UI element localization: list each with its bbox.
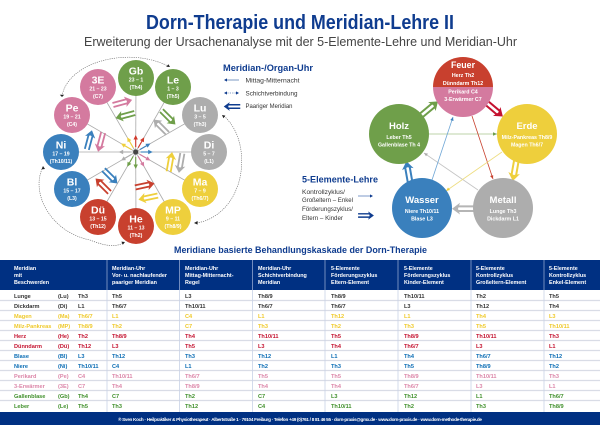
table header: Beschwerden	[14, 280, 49, 286]
table header	[0, 260, 600, 290]
table header: Kinder-Element	[404, 280, 444, 286]
row: Leber: Th12	[185, 404, 198, 410]
row: 3-Erwärmer: C7	[78, 384, 85, 390]
row: Herz: Herz	[14, 334, 26, 340]
meridian Pe: 19 – 21	[63, 114, 81, 120]
row: 3-Erwärmer: Th8/9	[185, 384, 200, 390]
row: Milz-Pankreas: C7	[185, 324, 192, 330]
row: 3-Erwärmer: Th4	[112, 384, 123, 390]
row: 3-Erwärmer: Th4	[331, 384, 342, 390]
row: Herz: Th10/11	[476, 334, 497, 340]
promotion cycle arrows	[401, 97, 522, 214]
row: Dünndarm: Th6/7	[404, 344, 419, 350]
row: Niere: Th8/9	[476, 364, 491, 370]
row: Herz: Th4	[185, 334, 196, 340]
row: Milz-Pankreas: Th3	[404, 324, 414, 330]
clock spokes	[61, 78, 209, 226]
element Feuer: Herz Th2	[452, 73, 474, 79]
meridian 3E: 21 – 23	[89, 86, 107, 92]
row: Perikard: (Pe)	[58, 374, 69, 380]
table header: Kontrollzyklus	[549, 273, 586, 279]
table header: mit	[14, 273, 22, 279]
row: Gallenblase: C7	[112, 394, 119, 400]
table header: Förderungszyklus	[331, 273, 377, 279]
meridian He: (Th2)	[130, 233, 143, 239]
row: Herz: Th5	[331, 334, 341, 340]
row: Dickdarm: Th6/7	[258, 304, 273, 310]
row: 3-Erwärmer	[14, 384, 556, 390]
table header: Kontrollzyklus	[476, 273, 513, 279]
row: 3-Erwärmer: 3-Erwärmer	[14, 384, 46, 390]
row: 3-Erwärmer: L1	[549, 384, 556, 390]
element Wasser: Wasser	[405, 195, 439, 206]
meridian Ma	[182, 171, 218, 207]
row: Milz-Pankreas: Th5	[476, 324, 486, 330]
row: Leber: (Le)	[58, 404, 68, 410]
legend: five elements	[302, 174, 378, 222]
element Metall: Lunge Th3	[490, 209, 516, 215]
row: Perikard: Th10/11	[112, 374, 133, 380]
meridian He	[118, 208, 154, 244]
meridian Le: (Th5)	[167, 94, 180, 100]
legend heading: Meridian-/Organ-Uhr	[223, 63, 313, 73]
row: Leber: Th3	[112, 404, 122, 410]
row: Magen: Th4	[476, 314, 487, 320]
row: Dickdarm	[14, 304, 560, 310]
row: Niere: Th2	[258, 364, 268, 370]
row: Blase: Th12	[112, 354, 125, 360]
row: Perikard: Th5	[258, 374, 268, 380]
table header: Meridian-Uhr	[258, 266, 292, 272]
row: Blase: Th3	[185, 354, 195, 360]
row: Perikard: C4	[78, 374, 86, 380]
row: Gallenblase: L1	[476, 394, 483, 400]
row: Herz: Th8/9	[112, 334, 127, 340]
meridian Di	[191, 134, 227, 170]
element Feuer: Feuer	[451, 60, 475, 71]
row: Milz-Pankreas: Th10/11	[549, 324, 570, 330]
table header: Großeltern-Element	[476, 280, 527, 286]
row: Niere: C4	[112, 364, 120, 370]
element Feuer: 3-Erwärmer C7	[444, 97, 482, 103]
meridian Dü: 13 – 15	[89, 216, 107, 222]
row: Herz: Th2	[78, 334, 88, 340]
row: Lunge	[14, 294, 559, 300]
meridian Ma: 7 – 9	[194, 188, 206, 194]
row: Dickdarm: Th10/11	[185, 304, 206, 310]
chart: five elements	[369, 57, 557, 238]
meridian Lu: 3 – 5	[194, 114, 206, 120]
meridian Le	[155, 69, 191, 105]
row: Lunge: (Lu)	[58, 294, 69, 300]
element Holz	[369, 104, 429, 164]
row: Leber: Th10/11	[331, 404, 352, 410]
meridian Bl: (L3)	[67, 196, 77, 202]
row: Dünndarm	[14, 344, 556, 350]
row: Leber: Th2	[404, 404, 414, 410]
element Erde: Magen Th6/7	[511, 142, 543, 148]
row: Milz-Pankreas: Th8/9	[78, 324, 93, 330]
table header: 5-Elemente	[331, 266, 360, 272]
meridian Ni	[43, 134, 79, 170]
row: Perikard: Th8/9	[404, 374, 419, 380]
row: Gallenblase: (Gb)	[58, 394, 70, 400]
table header: Eltern-Element	[331, 280, 369, 286]
title: Dorn-Therapie und Meridian-Lehre II	[146, 12, 454, 34]
legend item: paired meridian: Paariger Meridian	[246, 104, 292, 110]
row: Dünndarm: L3	[112, 344, 119, 350]
row: Niere: Th10/11	[78, 364, 99, 370]
meridian Dü: Dü	[91, 204, 105, 216]
element Metall	[473, 178, 533, 238]
meridian Ni: Ni	[56, 140, 66, 152]
row: Blase: (Bl)	[58, 354, 67, 360]
table header: Enkel-Element	[549, 280, 586, 286]
row: Milz-Pankreas: Th2	[112, 324, 122, 330]
element Erde: Erde	[516, 121, 538, 132]
element Wasser: Blase L3	[411, 216, 433, 222]
meridian Lu	[182, 97, 218, 133]
meridian MP	[155, 199, 191, 235]
row: Magen: L3	[549, 314, 556, 320]
legend: meridian organ clock	[223, 63, 313, 111]
table header: Meridian-Uhr	[185, 266, 219, 272]
table header: 5-Elemente	[549, 266, 578, 272]
row: Leber: Th5	[78, 404, 88, 410]
legend heading: 5-Elemente-Lehre	[302, 174, 378, 184]
legend item: promotion cycle: Eltern – Kinder	[302, 216, 343, 222]
row: Dünndarm: Th12	[78, 344, 91, 350]
row: Niere	[14, 364, 559, 370]
row: Magen: Th12	[331, 314, 344, 320]
legend item: control cycle: Großeltern – Enkel	[302, 198, 353, 204]
meridian Le: 1 – 3	[167, 86, 179, 92]
row: Gallenblase: Th12	[404, 394, 417, 400]
row: Gallenblase: Th4	[78, 394, 89, 400]
table header: paariger Meridian	[112, 280, 157, 286]
row: Perikard	[14, 374, 559, 380]
legend item: control cycle: Kontrollzyklus/	[302, 190, 345, 196]
meridian Bl	[54, 171, 90, 207]
row: Niere: (Ni)	[58, 364, 67, 370]
table header: Meridian	[258, 280, 280, 286]
row: Blase: Th12	[549, 354, 562, 360]
row: Dünndarm: (Dü)	[58, 344, 69, 350]
meridian Ma: Ma	[193, 176, 207, 188]
meridian Di: (L1)	[204, 159, 214, 165]
row: Dünndarm: L3	[476, 344, 483, 350]
meridian Di: Di	[204, 140, 214, 152]
meridian Pe: (C4)	[67, 122, 77, 128]
row: Lunge: Th10/11	[404, 294, 425, 300]
meridian He: He	[129, 214, 143, 226]
element Wasser: Niere Th10/11	[405, 209, 439, 215]
row: Leber	[14, 404, 564, 410]
row: Leber: Leber	[14, 404, 30, 410]
legend item: promotion cycle	[302, 207, 374, 222]
table header: 5-Elemente	[404, 266, 433, 272]
meridian Ni: (Th10/11)	[50, 159, 73, 165]
element Metall: Dickdarm L1	[487, 216, 519, 222]
row: Niere: Th2	[549, 364, 559, 370]
row: Lunge: Th5	[549, 294, 559, 300]
table header: Mittag-Mitternacht-	[185, 273, 234, 279]
row: Niere: Niere	[14, 364, 28, 370]
row: Dünndarm: Th4	[331, 344, 342, 350]
meridian Bl: 15 – 17	[63, 188, 81, 194]
row: Dickdarm: Dickdarm	[14, 304, 40, 310]
chart: meridian organ clock	[39, 57, 242, 246]
row: Niere: Th3	[331, 364, 341, 370]
meridian Pe	[54, 97, 90, 133]
row: Gallenblase	[14, 394, 564, 400]
row: Perikard: Th6/7	[185, 374, 200, 380]
row: Blase: Th12	[258, 354, 271, 360]
clock hub	[133, 149, 138, 155]
meridian Gb: 23 – 1	[129, 78, 143, 84]
row: Lunge: Th8/9	[258, 294, 273, 300]
row: Milz-Pankreas	[14, 324, 570, 330]
element Metall: Metall	[490, 195, 516, 206]
element Holz: Gallenblase Th 4	[378, 142, 420, 148]
legend item: control cycle	[302, 190, 373, 204]
table header: Schichtverbindung	[258, 273, 307, 279]
meridian Pe: Pe	[66, 102, 79, 114]
row: Milz-Pankreas: (MP)	[58, 324, 70, 330]
row: Lunge: Th3	[78, 294, 88, 300]
row: Magen	[14, 314, 556, 320]
element Holz: Holz	[389, 121, 409, 132]
element Holz: Leber Th5	[386, 135, 412, 141]
row: Blase: L3	[78, 354, 85, 360]
row: Lunge: Th2	[476, 294, 486, 300]
meridian MP: 9 – 11	[166, 216, 180, 222]
row: Gallenblase: Th6/7	[549, 394, 564, 400]
row: Perikard: Th5	[331, 374, 341, 380]
row: Lunge: Th8/9	[331, 294, 346, 300]
row: Niere: Th5	[404, 364, 414, 370]
element Erde	[497, 104, 557, 164]
row: 3-Erwärmer: L3	[476, 384, 483, 390]
element Erde: Milz-Pankreas Th8/9	[502, 135, 552, 141]
row: Lunge: Lunge	[14, 294, 31, 300]
row: Dickdarm: Th12	[476, 304, 489, 310]
row: Herz: Th3	[549, 334, 559, 340]
row: Dickdarm: L3	[404, 304, 411, 310]
meridian MP: MP	[165, 204, 181, 216]
row: Milz-Pankreas: Th2	[331, 324, 341, 330]
row: Herz: (He)	[58, 334, 69, 340]
legend item: layer link: Schichtverbindung	[246, 92, 298, 98]
row: Magen: Th6/7	[78, 314, 93, 320]
row: Gallenblase: Gallenblase	[14, 394, 45, 400]
row: Leber: Th3	[476, 404, 486, 410]
row: Lunge: L3	[185, 294, 192, 300]
row: Dünndarm: Th5	[185, 344, 195, 350]
subtitle: Erweiterung der Ursachenanalyse mit der 5-Elemente-Lehre und Meridian-Uhr	[84, 35, 517, 49]
control cycle lines	[424, 116, 502, 191]
element Wasser	[392, 178, 452, 238]
row: Magen: L1	[112, 314, 119, 320]
row: Dünndarm: L1	[549, 344, 556, 350]
table header: Meridian	[14, 266, 36, 272]
row: Dickdarm: Th4	[549, 304, 560, 310]
row: Herz: Th8/9	[404, 334, 419, 340]
meridian Gb: (Th4)	[130, 85, 143, 91]
row: Perikard: Perikard	[14, 374, 37, 380]
meridian 3E	[80, 69, 116, 105]
row: Perikard: Th10/11	[476, 374, 497, 380]
table header: Vor- u. nachlaufender	[112, 273, 168, 279]
legend item: midday-midnight: Mittag-Mitternacht	[246, 78, 300, 84]
row: Dickdarm: Th6/7	[331, 304, 346, 310]
row: Blase: Th6/7	[476, 354, 491, 360]
element Feuer	[433, 57, 493, 117]
element Feuer: Dünndarm Th12	[443, 81, 483, 87]
table heading: Meridiane basierte Behandlungskaskade der Dorn-Therapie	[174, 245, 427, 256]
row: Blase: L1	[331, 354, 338, 360]
row: Gallenblase: L3	[331, 394, 338, 400]
table header: Regel	[185, 280, 200, 286]
control cycle arrow heads	[424, 117, 497, 191]
row: Herz	[14, 334, 559, 340]
small radial arrows	[119, 135, 153, 169]
dashed midday-midnight arrows	[39, 57, 242, 246]
row: Magen: (Ma)	[58, 314, 70, 320]
table header: 5-Elemente	[476, 266, 505, 272]
row: Milz-Pankreas: Th3	[258, 324, 268, 330]
row: Perikard: Th3	[549, 374, 559, 380]
table: treatment cascade	[0, 260, 600, 412]
row: Blase: Th4	[404, 354, 415, 360]
row: Leber: C4	[258, 404, 266, 410]
meridian Ma: (Th6/7)	[191, 196, 209, 202]
row: Dünndarm: L3	[258, 344, 265, 350]
table header: Meridian-Uhr	[112, 266, 146, 272]
row: Dickdarm: Th6/7	[112, 304, 127, 310]
meridian Ni: 17 – 19	[52, 152, 70, 158]
footer	[0, 412, 600, 425]
row: 3-Erwärmer: Th4	[258, 384, 269, 390]
row: Leber: Th8/9	[549, 404, 564, 410]
dashed arrow heads	[42, 64, 225, 245]
meridian Dü: (Th12)	[90, 224, 106, 230]
row: Milz-Pankreas: Milz-Pankreas	[14, 324, 51, 330]
meridian Bl: Bl	[67, 176, 77, 188]
row: Magen: C4	[185, 314, 193, 320]
row: Lunge: Th5	[112, 294, 122, 300]
footer: ® Sven Koch · Heilpraktiker & Physiotherapeut · Albertstraße 1 · 79104 Freiburg · Telefon +49 (0)761 / 8 81 46 55 · dorn-praxis@gmx.de · www.dorn-praxis.de · www.dorn-methode-therapie.de	[118, 416, 482, 422]
row: Magen: L1	[404, 314, 411, 320]
row: Magen: Magen	[14, 314, 32, 320]
row: Blase: Blase	[14, 354, 29, 360]
element Feuer: Perikard C4	[448, 90, 478, 96]
row: Dickdarm: (Di)	[58, 304, 67, 310]
row: 3-Erwärmer: (3E)	[58, 384, 69, 390]
row: Dickdarm: L1	[78, 304, 85, 310]
meridian Lu: Lu	[194, 102, 206, 114]
meridian He: 11 – 13	[127, 226, 145, 232]
row: Gallenblase: Th2	[185, 394, 195, 400]
meridian 3E: 3E	[92, 74, 104, 86]
meridian Le: Le	[167, 74, 179, 86]
meridian Lu: (Th3)	[194, 122, 207, 128]
row: Herz: Th10/11	[258, 334, 279, 340]
meridian Gb: Gb	[129, 66, 143, 78]
meridian MP: (Th8/9)	[164, 224, 182, 230]
meridian Dü	[80, 199, 116, 235]
row: Dünndarm: Dünndarm	[14, 344, 42, 350]
meridian Di: 5 – 7	[203, 152, 215, 158]
meridian 3E: (C7)	[93, 94, 103, 100]
row: Gallenblase: C7	[258, 394, 265, 400]
paired meridian arrows	[82, 95, 187, 205]
row: Blase	[14, 354, 562, 360]
table header: Förderungszyklus	[404, 273, 450, 279]
legend item: promotion cycle: Förderungszyklus/	[302, 207, 353, 213]
row: 3-Erwärmer: Th6/7	[404, 384, 419, 390]
meridian Gb	[118, 60, 154, 96]
row: Magen: L1	[258, 314, 265, 320]
row: Niere: L1	[185, 364, 192, 370]
